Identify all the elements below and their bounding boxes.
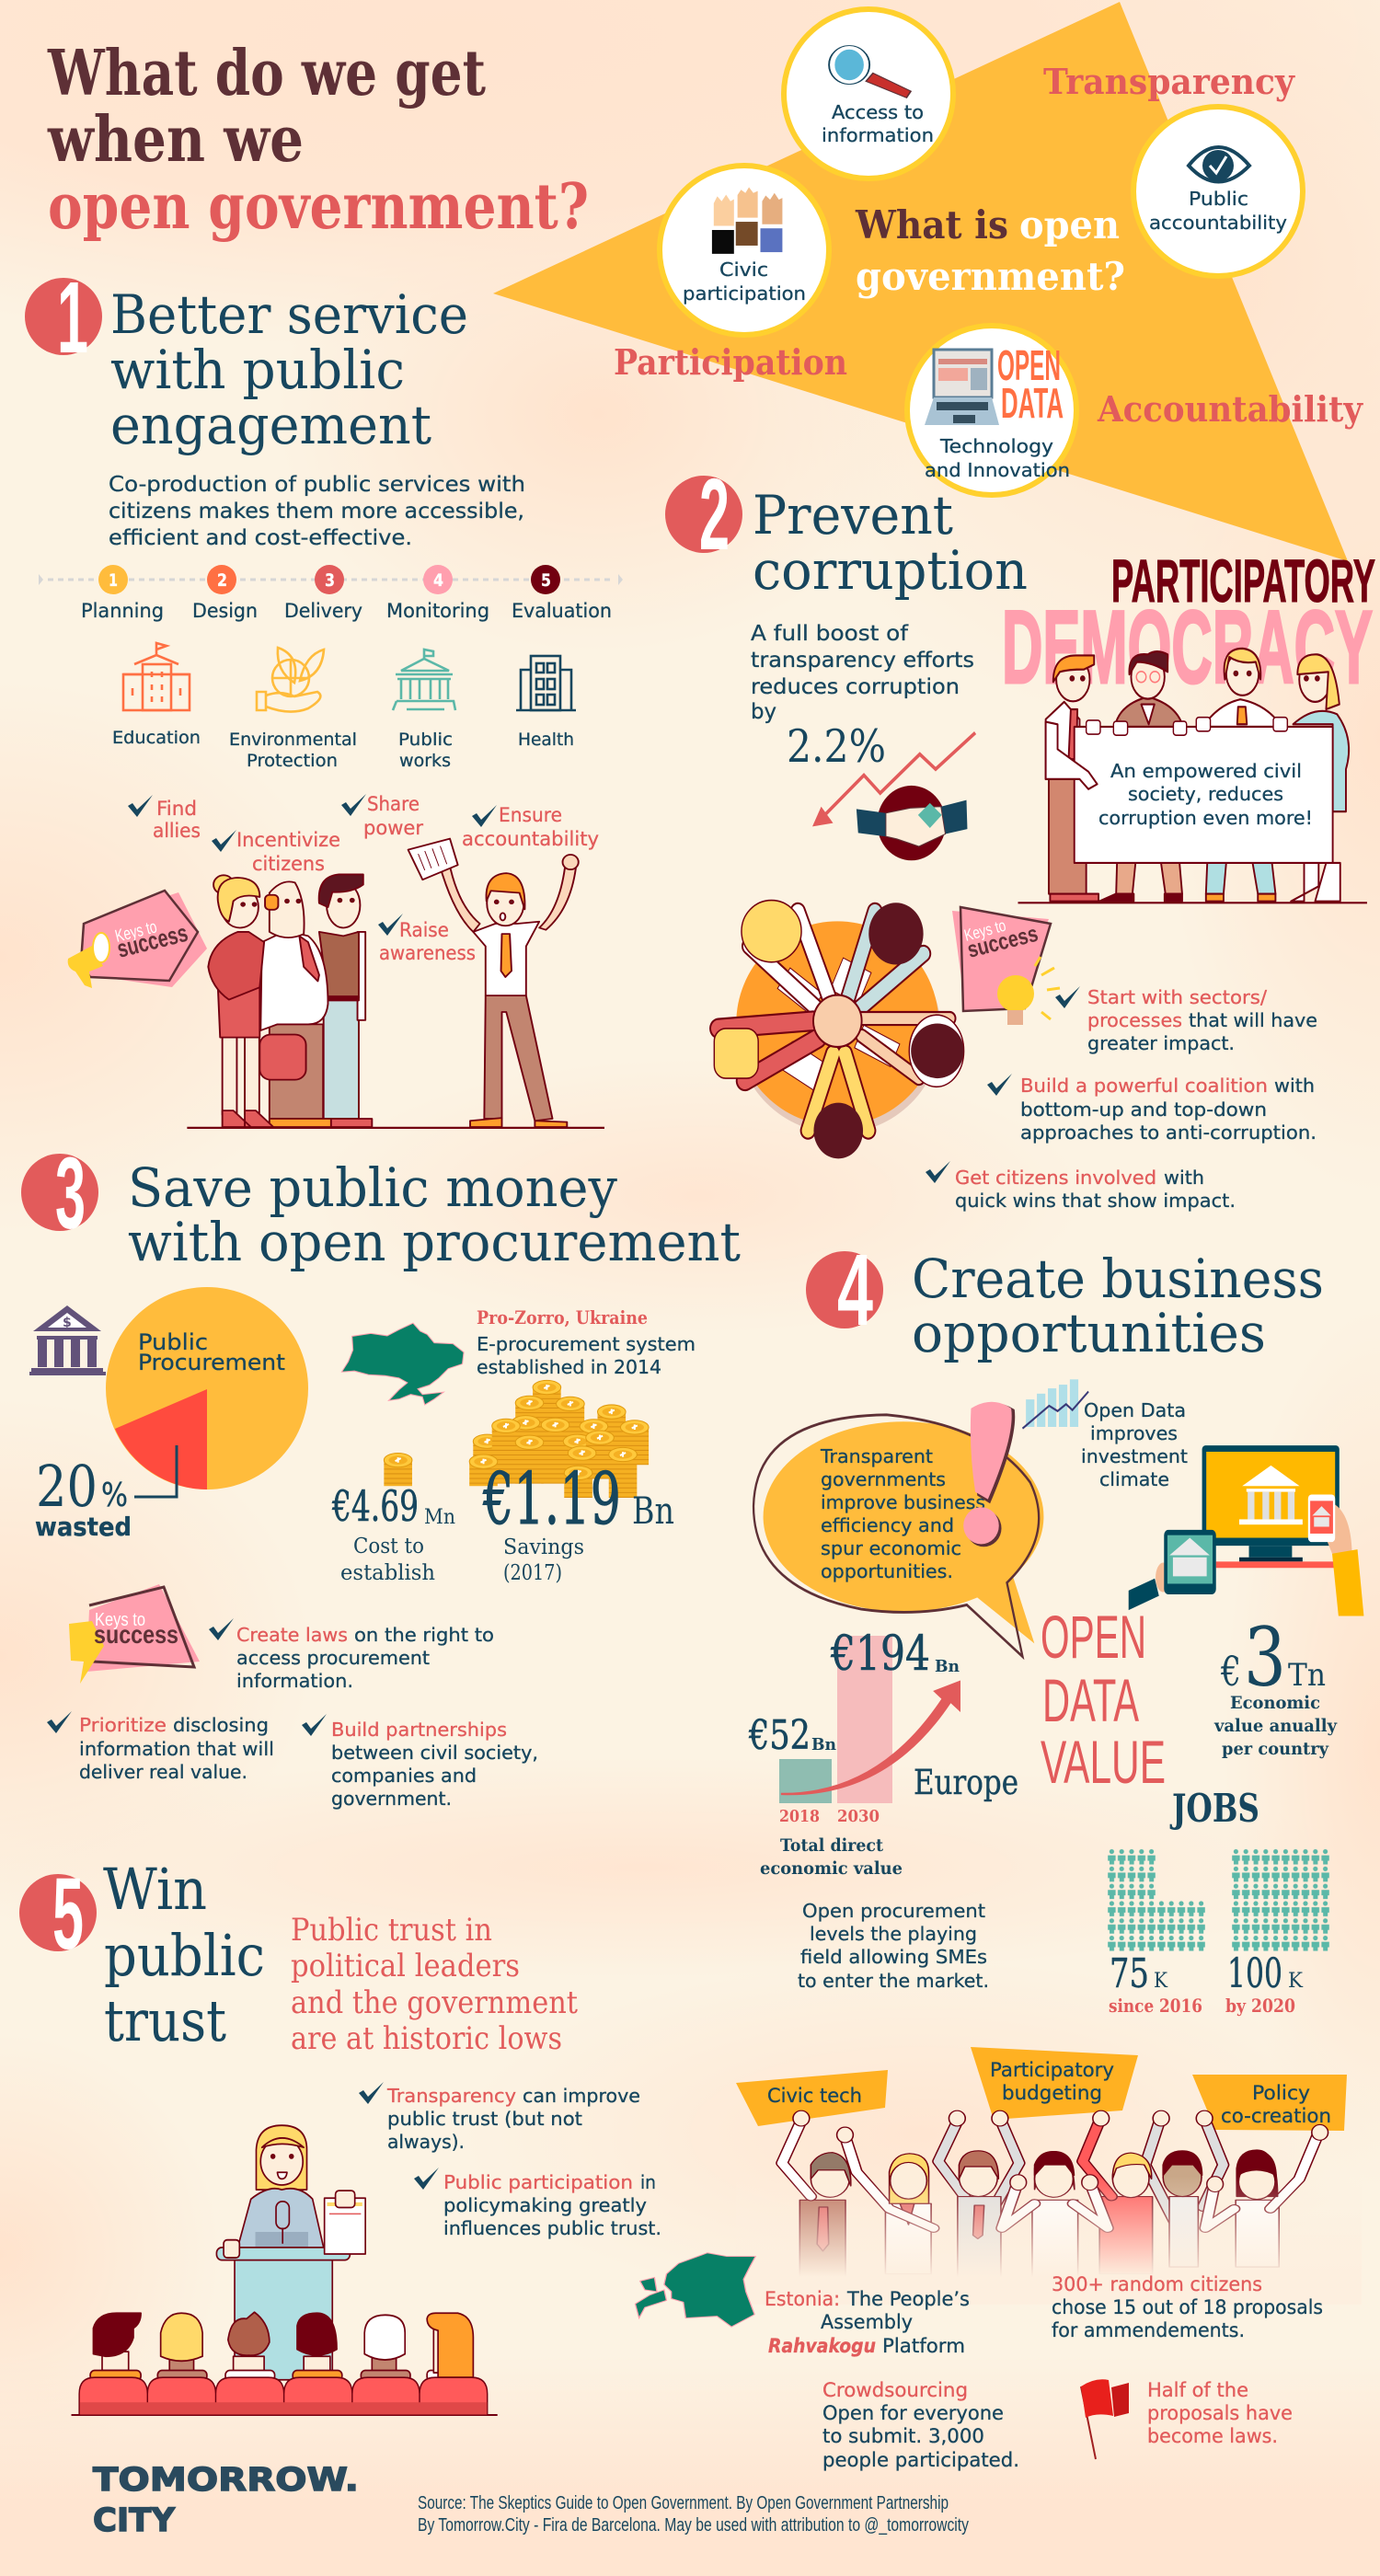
- icon: public works: [393, 650, 455, 710]
- tip: create laws: on the right to: [354, 1624, 494, 1646]
- text: open procurement SMEs: Open procurement: [802, 1900, 985, 1922]
- icon: growth bars: [1022, 1379, 1088, 1429]
- bar chart: direct economic value: Europe: [914, 1763, 1018, 1802]
- tip: start with sectors: [1055, 986, 1317, 1054]
- icon: health: [516, 656, 576, 710]
- tip: transparency: always).: [387, 2131, 465, 2153]
- process timeline: 3: [325, 570, 335, 591]
- heading: [103, 1856, 265, 2054]
- circle: public accountability: Public: [1189, 188, 1248, 210]
- title: [47, 37, 589, 244]
- number badge 1: [25, 261, 102, 374]
- keys to success tag with megaphone: Keys to: [113, 917, 159, 947]
- circle: technology and innovation: OPEN: [997, 341, 1061, 389]
- icon: eye with check: [1189, 147, 1249, 182]
- number badge 1: 1: [57, 261, 88, 374]
- number badge 3: 3: [55, 1137, 86, 1250]
- illustration: group with banner: [1018, 649, 1367, 903]
- map: Estonia: [635, 2253, 755, 2327]
- number badge 4: 4: [837, 1234, 873, 1347]
- tip: transparency: public trust (but not: [387, 2108, 582, 2130]
- heading: open data value: [1041, 1603, 1166, 1796]
- process timeline: 5: [541, 570, 551, 591]
- keys to success tag with lightbulb: success: [965, 921, 1041, 963]
- heading: Win: [103, 1856, 207, 1923]
- heading: open data value: VALUE: [1041, 1728, 1166, 1796]
- callout: share power: Share: [367, 793, 420, 815]
- tip: create laws: access procurement: [236, 1647, 430, 1669]
- number badge 4: [806, 1234, 883, 1347]
- illustration: cheering crowd: [736, 2110, 1362, 2305]
- tip: public participation: [414, 2168, 661, 2239]
- heading: what is open government: government?: [856, 254, 1125, 299]
- statistic: savings: Bn: [632, 1490, 674, 1533]
- statistic: 3 trillion: 3: [1244, 1610, 1286, 1705]
- case text: Pro-Zorro: E-procurement system: [477, 1333, 696, 1355]
- keys to success tag with lightning: Keys to: [95, 1610, 145, 1630]
- tip: public participation: influences public trust.: [443, 2217, 661, 2239]
- label: participation: Participation: [614, 341, 847, 383]
- number badge 5: 5: [52, 1857, 84, 1971]
- text: open data investment climate: climate: [1099, 1468, 1169, 1490]
- text: open procurement SMEs: field allowing SMEs: [800, 1946, 987, 1968]
- icon: education: [123, 643, 190, 710]
- heading: what is open government: What is: [855, 202, 1008, 247]
- icon: bank: $: [63, 1316, 72, 1330]
- circle: access to information: Access to: [832, 101, 924, 123]
- statistic: cost to establish: establish: [340, 1561, 435, 1585]
- callout: find allies: allies: [153, 820, 201, 842]
- illustration: citizens group: [187, 839, 604, 1128]
- tip: create laws: [209, 1618, 494, 1692]
- text: Estonia assembly: [765, 2288, 970, 2357]
- keys to success tag with lightbulb: [952, 907, 1060, 1025]
- statistic: 20% wasted: %: [101, 1477, 128, 1514]
- pie chart: public procurement: [106, 1287, 308, 1489]
- number badge 3: [21, 1137, 98, 1250]
- heading: [110, 283, 468, 456]
- title: open government?: [48, 170, 589, 244]
- statistic: 3 trillion: €: [1220, 1649, 1241, 1696]
- heading: Save public money: [128, 1156, 617, 1219]
- tip: transparency: Transparency: [386, 2085, 516, 2107]
- panel: section 3 save public money: [21, 1137, 741, 1810]
- logo: Tomorrow.City: [93, 2462, 359, 2539]
- panel: what is open government: [493, 2, 1363, 561]
- icon: laptop: [925, 350, 999, 425]
- case text: Pro-Zorro: Pro-Zorro, Ukraine: [477, 1306, 648, 1328]
- case text: Pro-Zorro: established in 2014: [477, 1356, 661, 1378]
- bar chart: direct economic value: 2030: [837, 1807, 880, 1826]
- heading: Create business: [912, 1248, 1324, 1310]
- callout: incentivize citizens: citizens: [252, 853, 325, 875]
- source text: By Tomorrow.City - Fira de Barcelona. May be used with attribution to @_tomorrowcity: [418, 2515, 969, 2536]
- sector labels: Protection: [247, 751, 338, 771]
- heading: what is open government: open: [1019, 202, 1120, 247]
- statistic: savings: [482, 1458, 674, 1585]
- text: half of proposals: become laws.: [1147, 2425, 1278, 2447]
- heading: Better service: [110, 283, 468, 346]
- tip: start with sectors: processes: [1087, 1009, 1182, 1031]
- text: crowdsourcing: Open for everyone: [822, 2402, 1004, 2424]
- callout: find allies: [128, 795, 201, 842]
- tip: get citizens involved: quick wins that show impact.: [955, 1190, 1236, 1212]
- text: random citizens: 300+ random citizens: [1052, 2273, 1262, 2295]
- circle: public accountability: accountability: [1149, 212, 1287, 234]
- callout: raise awareness: Raise: [399, 919, 449, 941]
- bar chart: direct economic value: Total direct: [780, 1835, 883, 1856]
- icon: red flag: [1081, 2379, 1129, 2459]
- icon: magnifier: [829, 46, 911, 98]
- speech bubble: improve business: [821, 1491, 985, 1513]
- text: open data investment climate: improves: [1090, 1422, 1178, 1444]
- heading: [912, 1248, 1324, 1364]
- process timeline: Delivery: [284, 600, 362, 622]
- tip: build a powerful coalition: with: [1274, 1075, 1315, 1097]
- bar chart: direct economic value: [748, 1627, 1018, 1879]
- circle: civic participation: [660, 166, 829, 335]
- statistic text: A full boost of: [751, 622, 909, 646]
- number badge 5: [19, 1857, 97, 1971]
- tip: start with sectors: Start with sectors/: [1087, 986, 1267, 1008]
- tip: prioritize: Prioritize: [79, 1714, 167, 1736]
- statistic: savings: €1.19: [482, 1458, 621, 1541]
- speech bubble: spur economic: [821, 1537, 961, 1559]
- circle: access to information: [784, 9, 953, 178]
- text: open data investment climate: investment: [1081, 1445, 1188, 1467]
- tip: build partnerships: between civil society,: [331, 1742, 538, 1764]
- icon: environmental protection: [257, 648, 324, 712]
- title: when we: [47, 103, 304, 177]
- bar chart: direct economic value: economic value: [760, 1858, 903, 1879]
- process timeline: 1: [109, 570, 118, 591]
- text: half of proposals: proposals have: [1147, 2402, 1293, 2424]
- description: Co-production of public services with: [109, 473, 525, 497]
- banner: policy co-creation: [1192, 2075, 1347, 2131]
- tip: start with sectors: greater impact.: [1087, 1032, 1235, 1054]
- circle: civic participation: Civic: [719, 259, 768, 281]
- process timeline: Monitoring: [386, 600, 489, 622]
- number badge 2: [665, 458, 742, 571]
- tip: prioritize: information that will: [79, 1738, 274, 1760]
- tip: build partnerships: Build partnerships: [331, 1719, 507, 1741]
- process timeline: 4: [433, 570, 443, 591]
- heading: open data value: DATA: [1042, 1666, 1139, 1734]
- case text: Pro-Zorro: [477, 1306, 696, 1378]
- text: half of proposals: [1147, 2379, 1293, 2447]
- sector labels: Education: [112, 728, 201, 748]
- panel: section 2 prevent corruption: [665, 458, 1375, 1212]
- pictogram chart: jobs: K: [1154, 1970, 1168, 1993]
- callout: incentivize citizens: Incentivize: [236, 829, 340, 851]
- heading: trust: [104, 1987, 226, 2054]
- heading: open data value: OPEN: [1041, 1603, 1146, 1671]
- circle: civic participation: participation: [683, 282, 806, 305]
- pictogram chart: jobs: JOBS: [1169, 1786, 1259, 1831]
- keys to success tag with lightning: [69, 1584, 200, 1684]
- sector labels: [112, 728, 574, 771]
- callout: ensure accountability: accountability: [462, 828, 599, 850]
- speech bubble: governments: [821, 1468, 946, 1490]
- number badge 2: 2: [699, 458, 730, 571]
- tip: transparency: [359, 2082, 640, 2153]
- text: open data investment climate: Open Data: [1084, 1399, 1186, 1421]
- text: crowdsourcing: [822, 2379, 1019, 2471]
- description: efficient and cost-effective.: [109, 526, 412, 550]
- heading: [128, 1156, 741, 1273]
- keys to success tag with lightning: success: [94, 1620, 178, 1649]
- statistic: 20% wasted: wasted: [35, 1512, 132, 1542]
- pictogram chart: jobs: 100: [1227, 1950, 1282, 1997]
- keys to success tag with megaphone: success: [114, 919, 190, 963]
- icon: exclamation mark: [963, 1402, 1015, 1547]
- process timeline: Evaluation: [512, 600, 612, 622]
- banner text: An empowered civil: [1110, 760, 1302, 782]
- callout: share power: power: [363, 817, 423, 839]
- process timeline: 2: [217, 570, 227, 591]
- callout: ensure accountability: Ensure: [499, 804, 562, 826]
- description: citizens makes them more accessible,: [109, 500, 524, 523]
- statistic: 20% wasted: [35, 1445, 177, 1542]
- sector labels: Environmental: [229, 730, 357, 750]
- text: Estonia assembly: Estonia:: [765, 2288, 840, 2310]
- pictogram chart: jobs: [1107, 1786, 1330, 2017]
- panel: participatory cases: [635, 2047, 1362, 2471]
- banner: civic tech: [736, 2070, 888, 2126]
- text: open procurement SMEs: [798, 1900, 989, 1992]
- tip: transparency: can improve: [523, 2085, 640, 2107]
- keys to success tag with lightbulb: Keys to: [962, 916, 1007, 945]
- statistic text: reduces corruption: [751, 675, 960, 699]
- banner: participatory budgeting: [971, 2047, 1138, 2120]
- pictogram chart: jobs: by 2020: [1225, 1995, 1295, 2017]
- source text: Source: The Skeptics Guide to Open Government. By Open Government Partnership: [418, 2493, 949, 2513]
- banner text: society, reduces: [1128, 783, 1283, 805]
- banner: participatory budgeting: Participatory: [990, 2059, 1114, 2081]
- logo: Tomorrow.City: CITY: [93, 2502, 176, 2539]
- statistic text: by: [751, 700, 776, 724]
- speech bubble: opportunities.: [821, 1560, 953, 1582]
- circle: technology and innovation: [907, 326, 1076, 495]
- heading: with public: [110, 339, 405, 401]
- panel: section 4 create business opportunities: [748, 1234, 1363, 2017]
- statistic text: 2.2%: [787, 720, 886, 773]
- tip: build partnerships: companies and: [331, 1765, 477, 1787]
- statistic: 3 trillion: [1213, 1610, 1338, 1759]
- icon: coin piles: [384, 1380, 649, 1498]
- illustration: devices with bank: [1129, 1445, 1363, 1616]
- heading: engagement: [110, 394, 431, 456]
- pictogram chart: jobs: since 2016: [1109, 1995, 1202, 2017]
- text: random citizens: for ammendements.: [1052, 2319, 1245, 2341]
- text: random citizens: [1052, 2273, 1323, 2341]
- panel: section 5 win public trust: [19, 1856, 969, 2539]
- process timeline: Design: [192, 600, 258, 622]
- heading: what is open government: [855, 202, 1125, 299]
- statistic text: [751, 622, 974, 773]
- illustration: speaker at podium and audience: [72, 2125, 498, 2415]
- text: half of proposals: Half of the: [1147, 2379, 1248, 2401]
- circle: technology and innovation: DATA: [1001, 379, 1064, 427]
- statistic: 3 trillion: value anually: [1213, 1716, 1338, 1736]
- bar chart: direct economic value: 2018: [779, 1807, 820, 1826]
- statistic: savings: (2017): [503, 1561, 562, 1585]
- text: crowdsourcing: people participated.: [822, 2449, 1019, 2471]
- panel: section 1 better service: [25, 261, 623, 1128]
- label: transparency: Transparency: [1043, 61, 1295, 102]
- statistic: 3 trillion: Tn: [1288, 1657, 1326, 1694]
- sector labels: Health: [518, 730, 574, 750]
- tip: build partnerships: [302, 1714, 538, 1810]
- tip: get citizens involved: with: [1164, 1167, 1204, 1189]
- tip: build partnerships: government.: [331, 1788, 452, 1810]
- icon: raised hands: [712, 188, 782, 254]
- tip: public participation: policymaking greatly: [443, 2194, 647, 2216]
- bar chart: direct economic value: €194: [830, 1627, 930, 1682]
- tip: build a powerful coalition: Build a powerful coalition: [1020, 1075, 1268, 1097]
- label: accountability: Accountability: [1097, 388, 1363, 430]
- heading: opportunities: [912, 1302, 1266, 1364]
- speech bubble: [753, 1415, 1043, 1657]
- text: open procurement SMEs: levels the playing: [810, 1923, 977, 1945]
- text: open procurement SMEs: to enter the market.: [798, 1970, 989, 1992]
- icon: bank: [29, 1305, 106, 1375]
- tip: get citizens involved: Get citizens involved: [955, 1167, 1156, 1189]
- subheading: public trust: [291, 1912, 578, 2057]
- heading: corruption: [753, 539, 1028, 602]
- tip: get citizens involved: [926, 1161, 1236, 1212]
- tip: prioritize: deliver real value.: [79, 1761, 247, 1783]
- sector labels: works: [399, 751, 451, 771]
- banner text: corruption even more!: [1098, 807, 1313, 829]
- pictogram chart: jobs: K: [1288, 1970, 1304, 1993]
- circle: technology and innovation: Technology: [939, 435, 1053, 457]
- speech bubble: efficiency and: [821, 1514, 954, 1536]
- pie chart: public procurement: Public: [138, 1329, 208, 1355]
- tip: public participation: Public participation: [443, 2171, 633, 2193]
- process timeline: [39, 565, 623, 622]
- tip: build a powerful coalition: bottom-up and top-down: [1020, 1098, 1267, 1121]
- tip: create laws: Create laws: [236, 1624, 348, 1646]
- text: Estonia assembly: Assembly: [821, 2311, 913, 2333]
- subheading: public trust: political leaders: [291, 1948, 520, 1984]
- pie chart: public procurement: Procurement: [138, 1350, 285, 1375]
- sector labels: Public: [398, 730, 453, 750]
- tip: build a powerful coalition: [987, 1074, 1317, 1144]
- callout: raise awareness: [378, 914, 476, 964]
- tip: create laws: information.: [236, 1670, 353, 1692]
- text: crowdsourcing: Crowdsourcing: [822, 2379, 968, 2401]
- callout: incentivize citizens: [212, 829, 340, 875]
- tip: start with sectors: that will have: [1189, 1009, 1317, 1031]
- tip: build a powerful coalition: approaches to anti-corruption.: [1020, 1121, 1317, 1144]
- icon: corruption decline arrow and handshake: [812, 732, 975, 860]
- banner: participatory budgeting: budgeting: [1002, 2082, 1102, 2104]
- text: open data investment climate: [1081, 1399, 1188, 1490]
- statistic text: transparency efforts: [751, 649, 974, 673]
- statistic: cost to establish: Mn: [424, 1506, 455, 1529]
- banner: civic tech: Civic tech: [767, 2085, 862, 2107]
- statistic: cost to establish: €4.69: [331, 1481, 419, 1531]
- map: Ukraine: [341, 1323, 464, 1405]
- subheading: public trust: are at historic lows: [291, 2020, 562, 2057]
- statistic: 3 trillion: Economic: [1230, 1693, 1320, 1713]
- banner text: [1098, 760, 1313, 829]
- bar chart: direct economic value: Bn: [935, 1657, 960, 1676]
- statistic: 20% wasted: 20: [36, 1453, 98, 1520]
- statistic: savings: Savings: [503, 1535, 584, 1559]
- pictogram chart: jobs: 75: [1110, 1950, 1149, 1997]
- circle: technology and innovation: and Innovation: [925, 459, 1070, 481]
- bar chart: direct economic value: Bn: [811, 1735, 836, 1754]
- tip: prioritize: [47, 1711, 274, 1783]
- source text: [418, 2493, 969, 2536]
- statistic: cost to establish: Cost to: [353, 1535, 424, 1558]
- process timeline: Planning: [81, 600, 164, 622]
- tip: public participation: in: [640, 2171, 656, 2193]
- text: Estonia assembly: The People’s: [846, 2288, 970, 2310]
- subheading: public trust: and the government: [291, 1984, 578, 2021]
- speech bubble: Transparent: [820, 1445, 933, 1467]
- text: Estonia assembly: Rahvakogu: [768, 2335, 876, 2357]
- text: random citizens: chose 15 out of 18 proposals: [1052, 2296, 1323, 2318]
- heading: [753, 484, 1028, 602]
- bar chart: direct economic value: €52: [748, 1712, 811, 1759]
- tip: prioritize: disclosing: [173, 1714, 269, 1736]
- circle: public accountability: [1133, 107, 1303, 276]
- callout: ensure accountability: [462, 804, 599, 850]
- text: crowdsourcing: to submit. 3,000: [822, 2425, 984, 2447]
- keys to success tag with megaphone: [68, 891, 207, 988]
- heading: Prevent: [753, 484, 953, 546]
- callout: share power: [341, 793, 423, 839]
- callout: find allies: Find: [156, 798, 197, 820]
- heading: with open procurement: [128, 1211, 741, 1273]
- statistic: cost to establish: [331, 1481, 455, 1585]
- heading: public: [104, 1922, 265, 1989]
- circle: access to information: information: [822, 124, 934, 146]
- description: [109, 473, 525, 550]
- banner: policy co-creation: Policy: [1252, 2082, 1310, 2104]
- text: Estonia assembly: Platform: [882, 2335, 965, 2357]
- illustration: hands together around table: [714, 901, 964, 1158]
- yellow triangle: [493, 2, 1348, 561]
- callout: raise awareness: awareness: [379, 942, 476, 964]
- statistic: 3 trillion: per country: [1222, 1739, 1329, 1759]
- logo: Tomorrow.City: TOMORROW.: [93, 2462, 359, 2499]
- subheading: public trust: Public trust in: [291, 1912, 492, 1949]
- banner: policy co-creation: co-creation: [1221, 2105, 1331, 2127]
- title: What do we get: [47, 37, 486, 110]
